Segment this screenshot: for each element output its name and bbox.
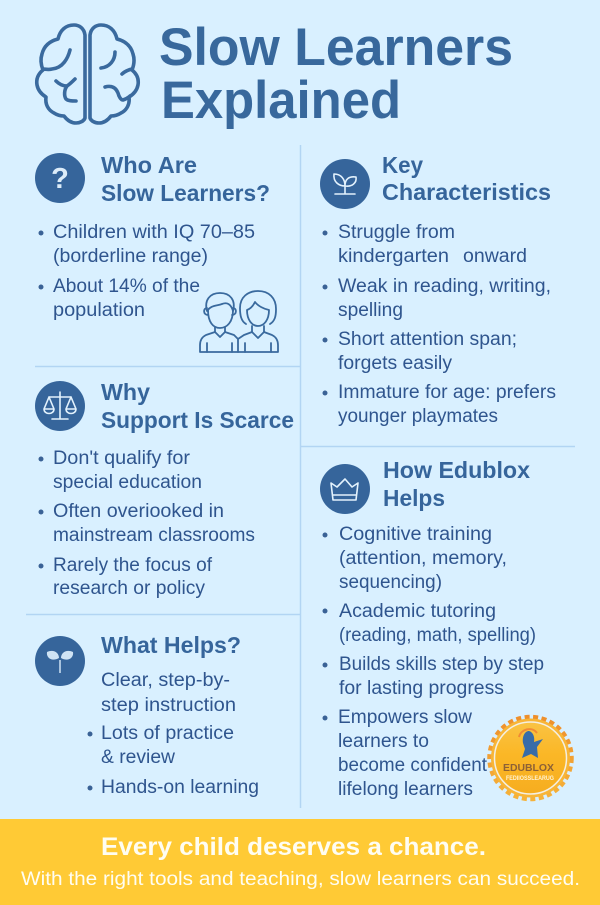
bullet list: how edublox helps: Empowers slow bbox=[338, 707, 472, 728]
bullet list: key characteristics: forgets easily bbox=[338, 353, 452, 374]
heading: who are slow learners: Who Are bbox=[101, 152, 197, 178]
heading: who are slow learners bbox=[101, 152, 270, 206]
bullet list: how edublox helps: (attention, memory, bbox=[339, 548, 507, 569]
bullet list: what helps: step instruction bbox=[101, 695, 236, 716]
bullet list: key characteristics: Immature for age: prefers bbox=[338, 382, 556, 403]
panel: key characteristics bbox=[320, 152, 556, 427]
bullet list: who are slow learners: (borderline range) bbox=[53, 246, 208, 267]
title: Explained bbox=[161, 71, 401, 130]
bullet list: how edublox helps: sequencing) bbox=[339, 572, 442, 593]
icon: question mark bbox=[35, 153, 85, 203]
icon: two children bbox=[200, 291, 278, 352]
bullet list: key characteristics: onward bbox=[463, 246, 527, 267]
panel: what helps bbox=[35, 632, 259, 798]
panel: how edublox helps bbox=[320, 457, 544, 800]
icon: question mark: ? bbox=[51, 163, 69, 195]
heading: how edublox helps: How Edublox bbox=[383, 457, 530, 483]
bullet list: why support is scarce: Don't qualify for bbox=[53, 448, 191, 469]
heading: key characteristics bbox=[382, 152, 551, 205]
icon: edublox badge: FEDIIOSSLEARUG bbox=[506, 775, 554, 782]
footer banner bbox=[0, 819, 600, 905]
bullet list: why support is scarce: Often overiooked in bbox=[53, 501, 224, 522]
panel: why support is scarce bbox=[35, 379, 294, 599]
bullet list: who are slow learners: Children with IQ 70–85 bbox=[53, 222, 255, 243]
bullet list: who are slow learners: population bbox=[53, 300, 145, 321]
panel: who are slow learners bbox=[35, 152, 278, 352]
bullet list: key characteristics: Weak in reading, writing, bbox=[338, 276, 551, 297]
bullet list: what helps: Lots of practice bbox=[101, 723, 234, 744]
heading: what helps: What Helps? bbox=[101, 632, 241, 658]
bullet list: who are slow learners: About 14% of the bbox=[53, 276, 200, 297]
footer headline: Every child deserves a chance. bbox=[101, 833, 486, 861]
bullet list: what helps bbox=[88, 670, 259, 798]
title: Slow Learners bbox=[159, 18, 513, 77]
icon: crown bbox=[320, 464, 370, 514]
bullet list: why support is scarce: Rarely the focus of bbox=[53, 555, 213, 576]
heading: why support is scarce: Support Is Scarce bbox=[101, 407, 294, 433]
icon: edublox badge: EDUBLOX bbox=[503, 762, 554, 774]
footer subline: With the right tools and teaching, slow learners can succeed. bbox=[21, 869, 580, 890]
heading: who are slow learners: Slow Learners? bbox=[101, 180, 270, 206]
bullet list: how edublox helps: Builds skills step by step bbox=[339, 654, 544, 675]
bullet list: what helps: & review bbox=[101, 747, 175, 768]
bullet list: key characteristics bbox=[322, 222, 556, 427]
icon: seedling bbox=[35, 636, 85, 686]
bullet list: how edublox helps: become confident bbox=[338, 755, 488, 776]
bullet list: how edublox helps: for lasting progress bbox=[339, 678, 504, 699]
heading: key characteristics: Key bbox=[382, 152, 423, 178]
heading: key characteristics: Characteristics bbox=[382, 179, 551, 205]
bullet list: why support is scarce: research or policy bbox=[53, 578, 206, 599]
bullet list: how edublox helps bbox=[322, 524, 544, 800]
bullet list: how edublox helps: lifelong learners bbox=[338, 779, 473, 800]
icon: sprout outline bbox=[320, 159, 370, 209]
bullet list: why support is scarce bbox=[38, 448, 255, 599]
bullet list: key characteristics: Struggle from bbox=[338, 222, 455, 243]
bullet list: what helps: Clear, step-by- bbox=[101, 670, 230, 691]
bullet list: why support is scarce: special education bbox=[53, 472, 202, 493]
bullet list: key characteristics: kindergarten bbox=[338, 246, 449, 267]
icon: edublox badge bbox=[490, 717, 572, 799]
heading: how edublox helps bbox=[383, 457, 530, 511]
heading: why support is scarce bbox=[101, 379, 294, 433]
bullet list: how edublox helps: learners to bbox=[338, 731, 429, 752]
title bbox=[159, 18, 513, 130]
bullet list: key characteristics: younger playmates bbox=[338, 406, 498, 427]
icon: scales bbox=[35, 381, 85, 431]
bullet list: key characteristics: Short attention span; bbox=[338, 329, 517, 350]
heading: why support is scarce: Why bbox=[101, 379, 150, 405]
heading: how edublox helps: Helps bbox=[383, 485, 445, 511]
bullet list: who are slow learners bbox=[38, 222, 255, 321]
bullet list: how edublox helps: Academic tutoring bbox=[339, 601, 496, 622]
bullet list: how edublox helps: (reading, math, spelling) bbox=[339, 625, 536, 646]
bullet list: how edublox helps: Cognitive training bbox=[339, 524, 492, 545]
icon: brain bbox=[37, 25, 138, 123]
bullet list: key characteristics: spelling bbox=[338, 300, 403, 321]
bullet list: why support is scarce: mainstream classrooms bbox=[53, 525, 255, 546]
bullet list: what helps: Hands-on learning bbox=[101, 777, 259, 798]
